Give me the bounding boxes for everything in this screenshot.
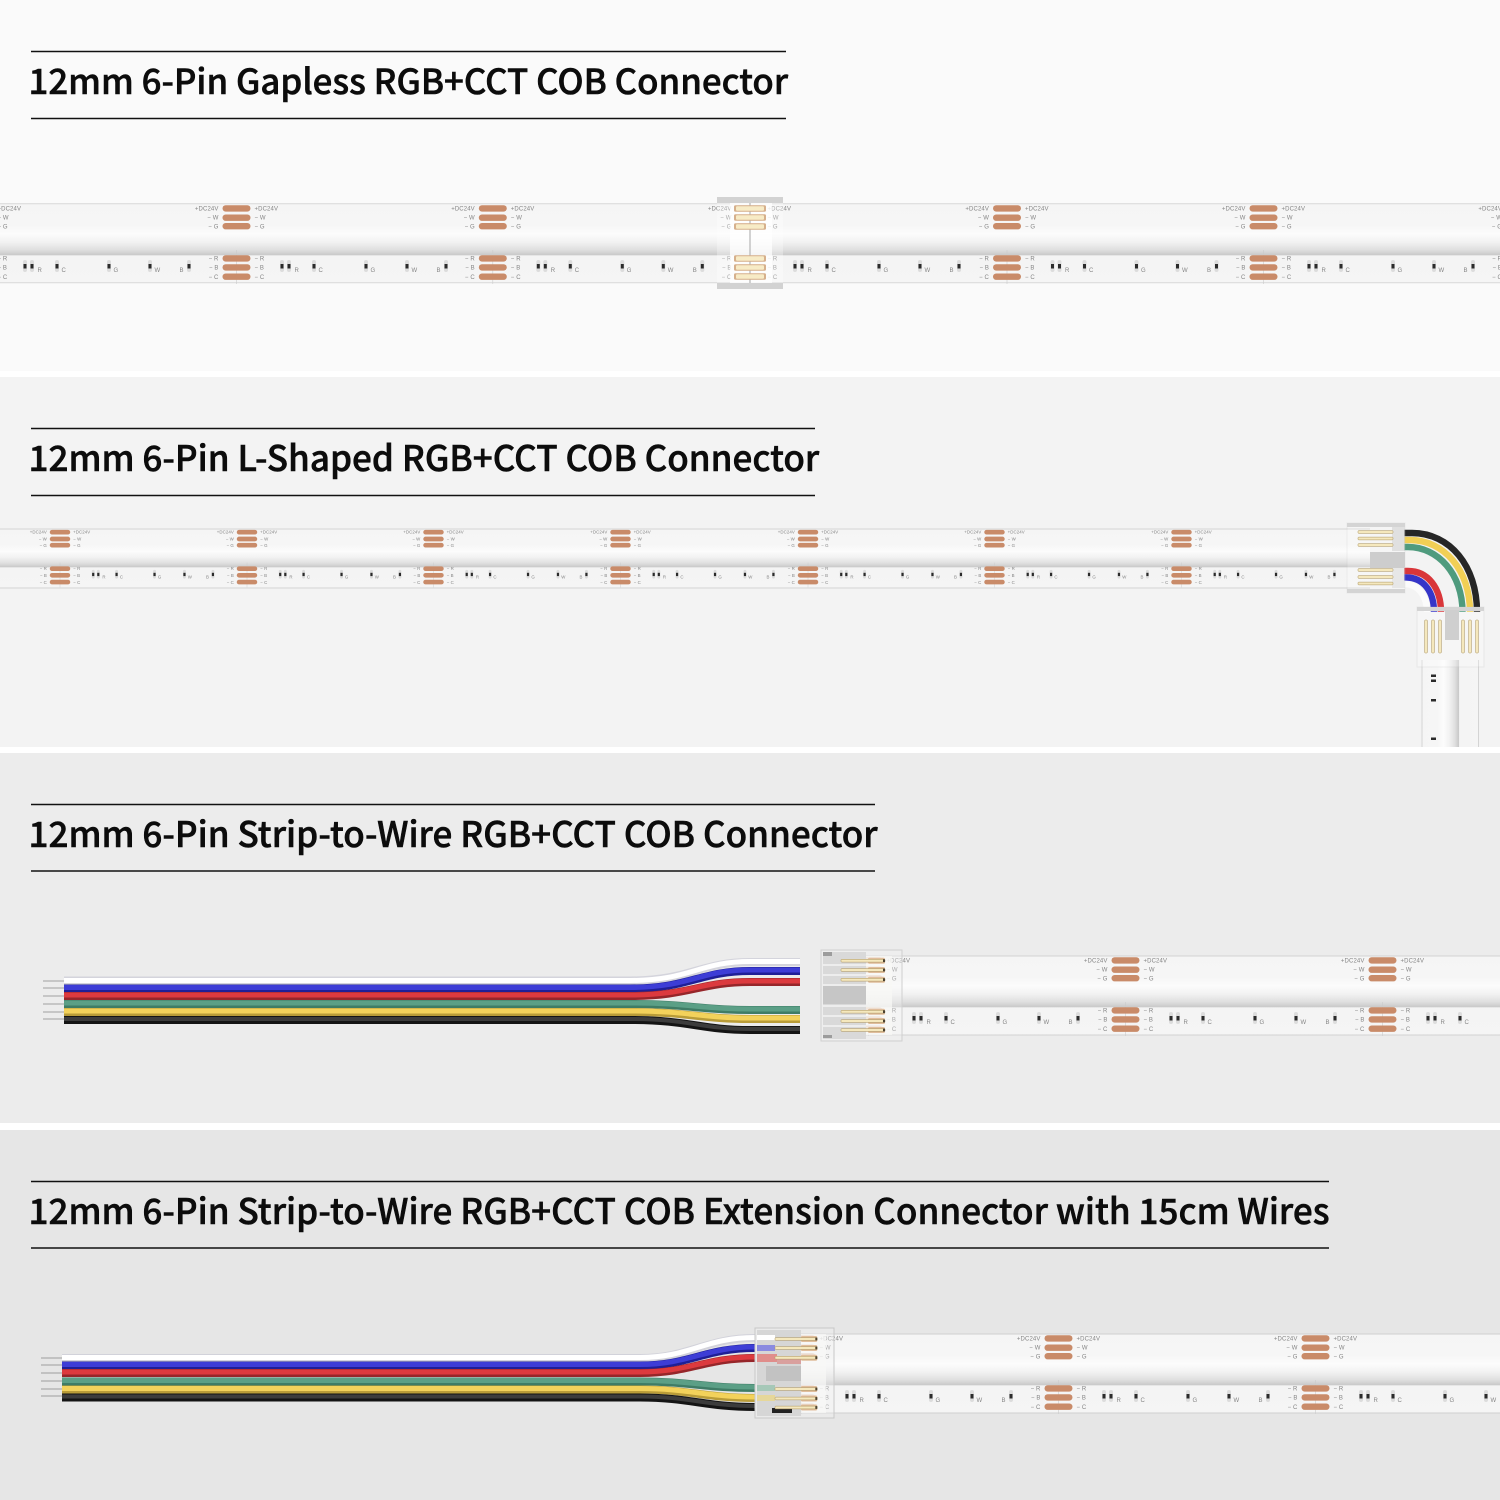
- connector: strip-to-wire: [821, 950, 902, 1041]
- bare wire tips: [41, 1358, 62, 1396]
- panel: gapless connector: [0, 0, 1500, 371]
- title: L-shaped connector: 12mm 6-Pin L-Shaped RGB+CCT COB Connector: [28, 431, 820, 482]
- connector: horizontal end: [1347, 523, 1405, 593]
- connector: vertical end: [1417, 607, 1484, 667]
- bare wire tips: [43, 981, 64, 1019]
- panel: strip-to-wire connector: [0, 753, 1500, 1123]
- panel: L-shaped connector: [0, 377, 1500, 747]
- title: strip-to-wire connector: 12mm 6-Pin Strip-to-Wire RGB+CCT COB Connector: [28, 807, 878, 858]
- six-colour ribbon cable: [64, 962, 800, 1030]
- LED strip: gapless: [0, 204, 1500, 284]
- wires: six-colour L bend: [1404, 533, 1477, 612]
- panel: extension connector: [0, 1130, 1500, 1500]
- title: extension connector: 12mm 6-Pin Strip-to-Wire RGB+CCT COB Extension Connector with 15cm Wires: [28, 1184, 1330, 1235]
- LED strip: vertical: [1422, 660, 1479, 747]
- title: gapless connector: 12mm 6-Pin Gapless RGB+CCT COB Connector: [28, 55, 789, 105]
- LED strip: [827, 956, 1500, 1036]
- LED strip: [760, 1334, 1500, 1414]
- LED strip: horizontal: [0, 529, 1370, 588]
- connector: extension: [755, 1328, 834, 1418]
- connector: gapless joint: [717, 197, 783, 289]
- six-colour ribbon cable: [62, 1338, 755, 1407]
